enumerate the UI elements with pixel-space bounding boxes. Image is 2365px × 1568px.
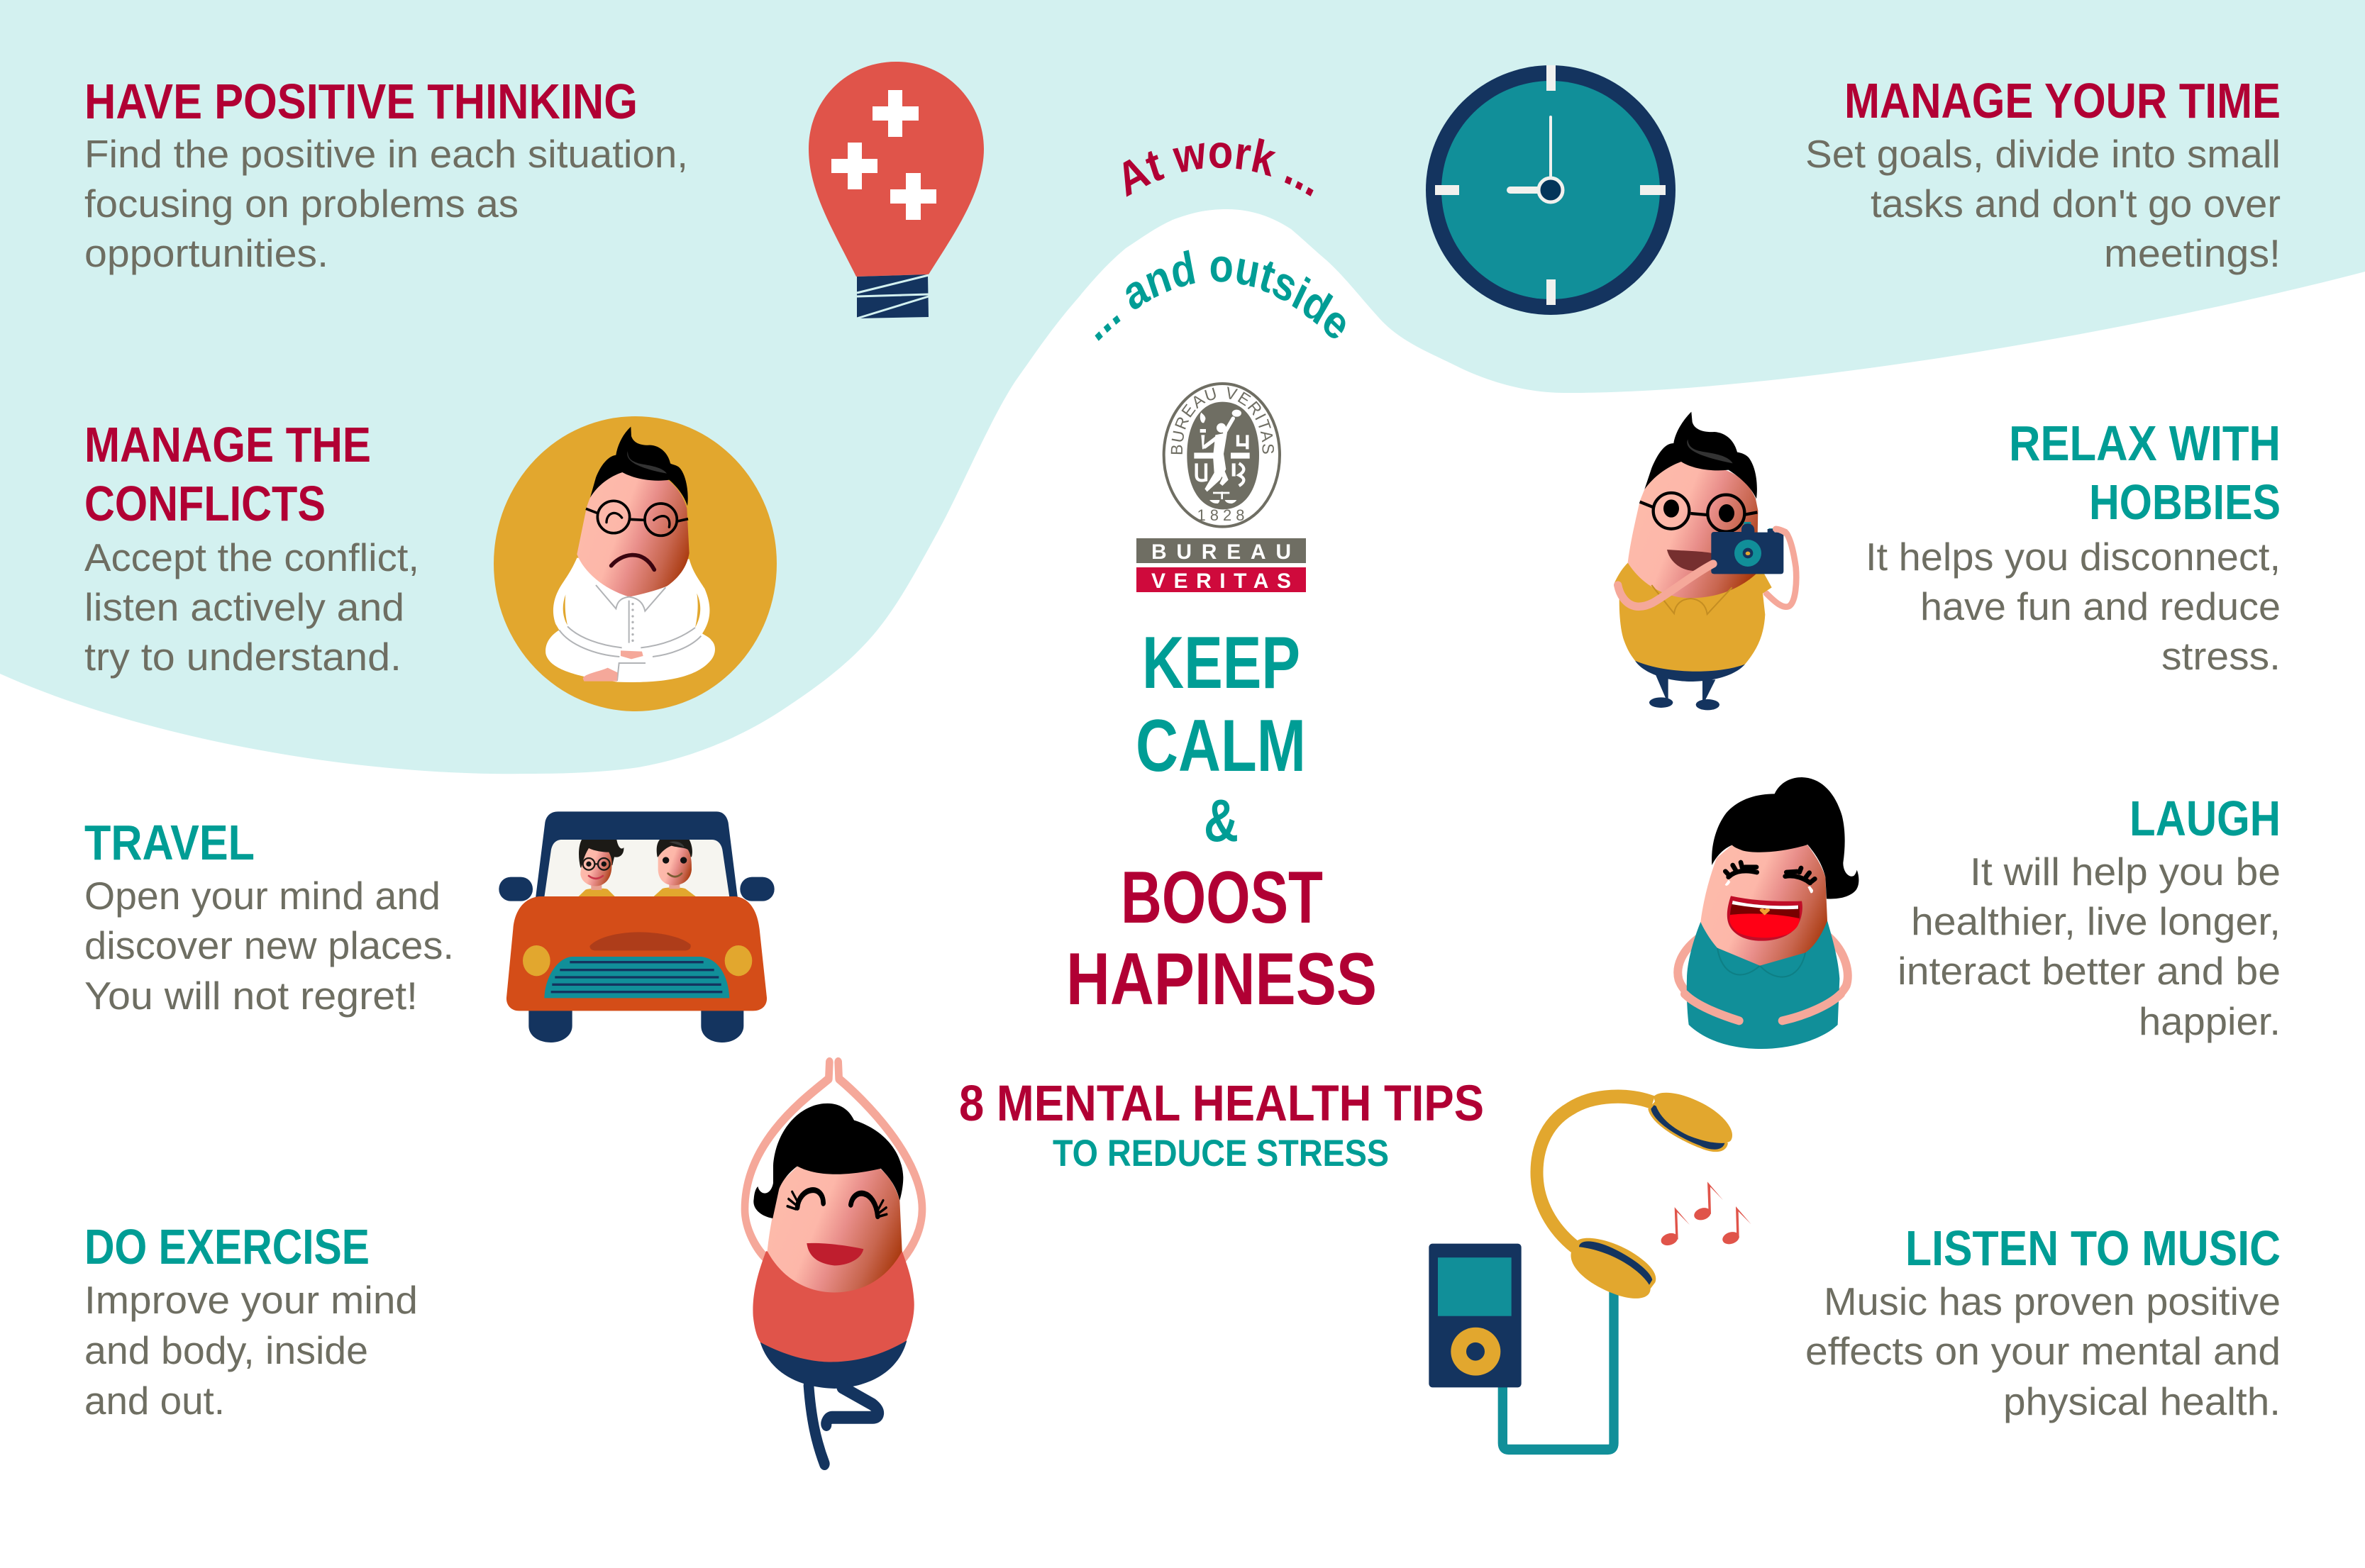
title: keep calm and boost happiness: CALM <box>1136 705 1306 787</box>
description: have fun and reduce <box>1920 584 2281 628</box>
illustration: music player and headphones <box>1429 1093 1751 1450</box>
subtitle: TO REDUCE STRESS <box>1053 1133 1389 1174</box>
description: listen actively and <box>84 585 404 629</box>
description <box>84 535 419 679</box>
tip: manage your time <box>1805 73 2281 275</box>
description: Find the positive in each situation, <box>84 132 688 176</box>
description: Open your mind and <box>84 874 441 918</box>
description <box>1898 850 2281 1043</box>
description: discover new places. <box>84 923 454 967</box>
heading: RELAX WITH <box>2009 416 2281 471</box>
heading: MANAGE YOUR TIME <box>1844 73 2281 128</box>
logo seal: BUREAU VERITAS <box>1170 387 1274 454</box>
description: Accept the conflict, <box>84 535 419 579</box>
illustration: car with two passengers <box>499 811 775 1042</box>
heading: HAVE POSITIVE THINKING <box>84 74 638 129</box>
heading: CONFLICTS <box>84 476 326 531</box>
heading <box>2009 416 2281 530</box>
tip: manage the conflicts <box>84 417 419 679</box>
description <box>1805 1279 2281 1423</box>
logo seal <box>1162 382 1281 528</box>
tip: do exercise <box>84 1219 418 1423</box>
description: meetings! <box>2104 231 2281 275</box>
description <box>1866 535 2281 678</box>
description: Set goals, divide into small <box>1805 132 2281 176</box>
logo wordmark: veritas: VERITAS <box>1151 569 1291 593</box>
description: Music has proven positive <box>1824 1279 2281 1323</box>
tip: have positive thinking <box>84 74 688 275</box>
tip: relax with hobbies <box>1866 416 2281 678</box>
curved label: at work: At work ... <box>1124 138 1314 197</box>
description <box>84 874 454 1018</box>
icon: clock <box>1426 65 1676 315</box>
illustration: man with camera <box>1614 412 1796 710</box>
illustration: laughing woman <box>1678 777 1859 1049</box>
description <box>84 132 688 275</box>
illustration: woman doing yoga <box>745 1062 922 1464</box>
title: keep calm and boost happiness <box>1066 622 1377 1021</box>
Bureau Veritas logo <box>1136 382 1306 593</box>
logo seal: 1828 <box>1197 506 1248 524</box>
description <box>84 1278 418 1423</box>
heading: LAUGH <box>2129 791 2281 846</box>
description: try to understand. <box>84 635 401 679</box>
description: interact better and be <box>1898 949 2281 993</box>
description: happier. <box>2139 999 2281 1043</box>
description: You will not regret! <box>84 974 418 1018</box>
description: focusing on problems as <box>84 182 519 226</box>
heading: LISTEN TO MUSIC <box>1905 1221 2281 1276</box>
description <box>1805 132 2281 275</box>
tip: laugh <box>1898 791 2281 1043</box>
description: It will help you be <box>1970 850 2281 894</box>
description: It helps you disconnect, <box>1866 535 2281 579</box>
description: and out. <box>84 1379 225 1423</box>
description: and body, inside <box>84 1328 368 1372</box>
subtitle: 8 MENTAL HEALTH TIPS <box>959 1076 1484 1132</box>
curved label: and outside: ... and outside <box>1095 250 1345 341</box>
description: healthier, live longer, <box>1911 899 2281 943</box>
subtitle <box>959 1076 1484 1174</box>
description: stress. <box>2161 634 2281 678</box>
title: keep calm and boost happiness: BOOST <box>1121 857 1323 939</box>
description: Improve your mind <box>84 1278 418 1322</box>
tip: travel <box>84 815 454 1018</box>
title: keep calm and boost happiness: KEEP <box>1142 622 1300 704</box>
heading: DO EXERCISE <box>84 1219 370 1274</box>
icon: light bulb <box>809 62 984 318</box>
description: tasks and don't go over <box>1871 182 2281 226</box>
heading: HOBBIES <box>2089 474 2281 530</box>
heading: MANAGE THE <box>84 417 371 472</box>
pale blue background shape <box>0 0 2365 774</box>
description: physical health. <box>2003 1379 2281 1423</box>
illustration: conflicted man in circle <box>494 416 777 711</box>
logo wordmark: bureau: BUREAU <box>1151 540 1291 564</box>
description: effects on your mental and <box>1805 1329 2281 1373</box>
description: opportunities. <box>84 231 328 275</box>
title: keep calm and boost happiness: & <box>1204 787 1239 854</box>
title: keep calm and boost happiness: HAPINESS <box>1066 938 1377 1021</box>
heading: TRAVEL <box>84 815 255 870</box>
tip: listen to music <box>1805 1221 2281 1423</box>
heading <box>84 417 371 531</box>
